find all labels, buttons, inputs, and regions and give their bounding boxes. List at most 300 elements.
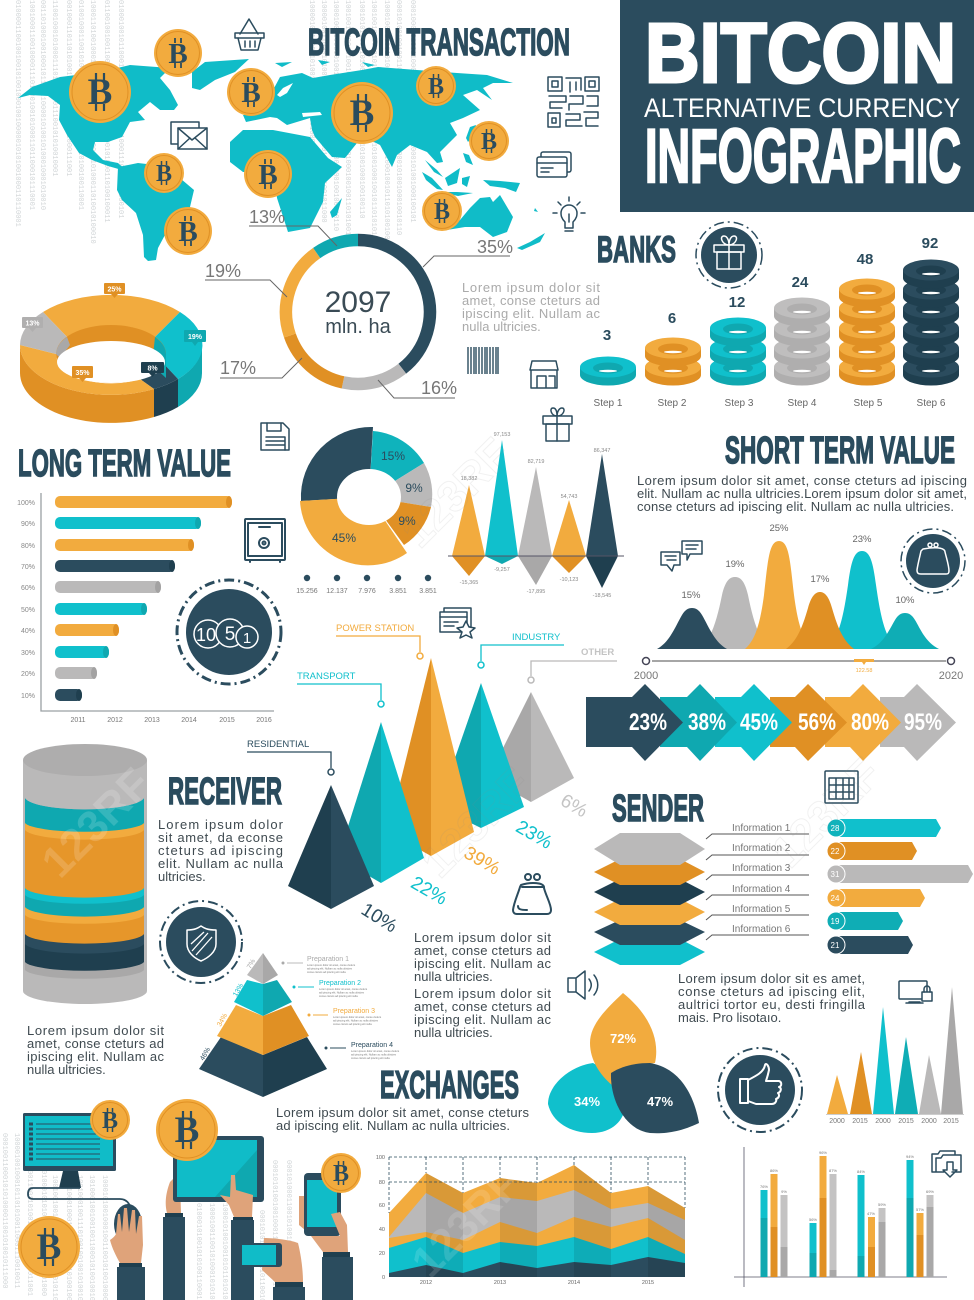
diamond chart: -9,257 bbox=[494, 567, 510, 573]
bell curve chart: 19% bbox=[725, 559, 745, 570]
icon: basket bbox=[235, 19, 264, 50]
bar 28 bbox=[827, 819, 941, 837]
ring chart 2097: 16% bbox=[421, 378, 457, 398]
donut chart: 9% bbox=[398, 514, 416, 528]
icon: store bbox=[530, 361, 558, 388]
callout: industry: INDUSTRY bbox=[512, 632, 561, 643]
step 1: Step 1 bbox=[594, 398, 623, 409]
step 5: 48 bbox=[857, 251, 873, 268]
coin: B bbox=[258, 159, 278, 191]
text block: receiver: sit amet, da econse bbox=[158, 830, 283, 845]
mouse hand bbox=[110, 1204, 145, 1300]
binary background bottom: 000101000110010100101001001001 bbox=[284, 1160, 292, 1286]
binary background top middle: 10001001100010100100011010101000101001000100101101010010010 bbox=[382, 0, 390, 248]
donut chart: 45% bbox=[332, 531, 356, 545]
world map bbox=[18, 59, 545, 261]
binary background top left: 10010001100100001110100010010100011011000101110001 bbox=[27, 0, 35, 210]
arrow band percentages: 38% bbox=[688, 709, 726, 736]
icon: purse bbox=[513, 874, 551, 914]
long term bar chart: 50% bbox=[21, 607, 35, 614]
icon: coins in circle: 5 bbox=[225, 624, 235, 645]
bar 24: 24 bbox=[831, 894, 840, 903]
bar 28: 28 bbox=[831, 824, 840, 833]
long term bar chart: 2014 bbox=[181, 717, 197, 724]
bell curve chart: 15% bbox=[681, 590, 701, 601]
icon: purse in circle bbox=[901, 529, 965, 593]
bar 24 bbox=[827, 889, 925, 907]
callout: industry bbox=[478, 632, 564, 668]
coin bbox=[244, 150, 292, 198]
diamond chart: -10,123 bbox=[560, 577, 578, 583]
callout: other: OTHER bbox=[581, 647, 614, 658]
callout: other bbox=[528, 647, 617, 683]
leaf chart: 47% bbox=[647, 1094, 673, 1109]
preparation 3: conse cteturs ad ipiscing elit nulla bbox=[333, 1022, 372, 1026]
preparation 3: Preparation 3 bbox=[333, 1008, 375, 1015]
binary background top left: 010000110010010010100100010010000010101001000110110001 bbox=[13, 0, 21, 227]
timeline: 2020 bbox=[939, 670, 963, 682]
coin: B bbox=[333, 1161, 349, 1187]
stacked area chart: 40 bbox=[379, 1227, 385, 1233]
text block: middle lorem 2 bbox=[414, 986, 552, 1040]
pyramid percent labels: 22% bbox=[407, 873, 451, 910]
watermark: 123RF bbox=[412, 759, 540, 887]
arrow band percentages: 45% bbox=[740, 709, 778, 736]
icon: monitor lock bbox=[899, 981, 932, 1003]
hexagon stack bbox=[594, 833, 705, 965]
coin: B bbox=[241, 77, 261, 109]
binary background top middle: 00010100100100110001010010011010100100010100100010010110 bbox=[394, 0, 402, 235]
information list: Information 6 bbox=[732, 924, 791, 935]
information list bbox=[706, 823, 809, 940]
text block: gray lorem: Lorem ipsum dolor sit bbox=[462, 280, 600, 295]
label 8% bbox=[141, 362, 164, 377]
text block: receiver: ultricies. bbox=[158, 869, 206, 884]
icon: envelope bbox=[171, 122, 207, 149]
timeline: 122.58 bbox=[856, 668, 872, 674]
coin: B bbox=[102, 1108, 118, 1134]
ring chart 2097: 19% bbox=[205, 261, 241, 281]
3D donut chart bbox=[20, 283, 206, 423]
step 6: 92 bbox=[922, 235, 938, 252]
coin bbox=[164, 207, 212, 255]
leaf chart: 72% bbox=[610, 1031, 636, 1046]
binary background top left bbox=[13, 0, 124, 244]
ring chart 2097: 35% bbox=[477, 237, 513, 257]
pyramid percent labels: 10% bbox=[357, 899, 401, 937]
long term bar chart: 100% bbox=[17, 500, 35, 507]
layered pyramid: 13% bbox=[232, 982, 245, 998]
mini triangle chart: 2000 bbox=[921, 1118, 937, 1125]
text block: sender: aultrici tortor eu, desti fringilla bbox=[678, 997, 866, 1012]
donut legend: 7.976 bbox=[358, 588, 376, 595]
step 3: Step 3 bbox=[725, 398, 754, 409]
grouped bar chart: 56% bbox=[809, 1217, 817, 1222]
text block: exchanges: ad ipiscing elit. Nullam ac nulla ultricies. bbox=[276, 1118, 510, 1133]
text block: gray lorem: nulla ultricies. bbox=[462, 319, 541, 334]
watermark bbox=[32, 429, 890, 1287]
pyramid layer: navy bbox=[199, 1037, 327, 1097]
icon: chat bubbles bbox=[661, 541, 702, 571]
heading: bitcoin transaction: BITCOIN TRANSACTION bbox=[308, 22, 570, 64]
coin bbox=[69, 61, 131, 123]
preparation 1: Lorem ipsum dolor sit amet, conse cteturs bbox=[307, 963, 356, 967]
mini triangle chart: 2015 bbox=[898, 1118, 914, 1125]
coin: B bbox=[168, 38, 188, 70]
long term bar chart: 40% bbox=[21, 628, 35, 635]
mini triangle chart bbox=[826, 987, 964, 1125]
monitor bbox=[23, 1113, 130, 1206]
timeline: 2000 bbox=[634, 670, 658, 682]
label 35%: 35% bbox=[75, 370, 90, 377]
text block: receiver: cteturs ad ipiscing bbox=[158, 843, 283, 858]
preparation 4: conse cteturs ad ipiscing elit nulla bbox=[351, 1056, 390, 1060]
illustration: tablet and hands bbox=[156, 1099, 361, 1300]
text block: left lorem: Lorem ipsum dolor sit bbox=[27, 1023, 164, 1038]
icon: coins in circle bbox=[177, 580, 281, 684]
grouped bar chart: 87% bbox=[829, 1168, 837, 1173]
text block: gray lorem: amet, conse cteturs ad bbox=[462, 293, 600, 308]
preparation 3 bbox=[308, 1008, 382, 1026]
heading: sender: SENDER bbox=[612, 788, 704, 830]
coin: B bbox=[37, 1227, 61, 1268]
binary background bottom: 100010100100010011001010010000 bbox=[100, 1175, 108, 1300]
text block: left lorem: ipiscing elit. Nullam ac bbox=[27, 1049, 164, 1064]
bar 21: 21 bbox=[831, 941, 840, 950]
icon: speaker bbox=[568, 971, 598, 999]
arrow band percentages: 56% bbox=[798, 709, 836, 736]
title block bbox=[620, 0, 974, 212]
icon: floppy disk bbox=[261, 423, 289, 450]
preparation 4: ad ipiscing elit. Nullam ac nulla ultricies bbox=[351, 1052, 397, 1056]
binary background bottom: 010100010001101010010010100100 bbox=[64, 1175, 72, 1300]
text block: middle lorem 1: amet, conse cteturs ad bbox=[414, 943, 551, 958]
icon: light bulb bbox=[553, 197, 585, 231]
coin: B bbox=[350, 93, 374, 134]
watermark: 123RF bbox=[762, 749, 890, 877]
long term bar chart: 30% bbox=[21, 650, 35, 657]
long term bar chart: 70% bbox=[21, 564, 35, 571]
layered pyramid: 7% bbox=[246, 958, 257, 970]
text block: left lorem bbox=[27, 1023, 164, 1077]
bar 22 bbox=[827, 842, 917, 860]
icon: qr code bbox=[548, 77, 599, 127]
binary background top middle: 10010010110001010010001101010010001010010001001011010101 bbox=[369, 0, 377, 235]
coin bbox=[422, 191, 462, 231]
diamond chart: 82,719 bbox=[528, 459, 544, 465]
preparation 1: ad ipiscing elit. Nullam ac nulla ultricies bbox=[307, 966, 353, 970]
preparation 3: Lorem ipsum dolor sit amet, conse cteturs bbox=[333, 1015, 382, 1019]
pyramid chart bbox=[247, 623, 617, 937]
binary background top left: 01100100100110001010010001110010100101000110100100011 bbox=[102, 0, 110, 223]
grouped bar chart: 47% bbox=[867, 1211, 875, 1216]
binary background top middle: 10000100110001010010001101010010001010010001001011000 bbox=[319, 0, 327, 223]
diamond chart: -17,895 bbox=[527, 589, 545, 595]
bitcoin coins on map bbox=[69, 29, 509, 255]
label 8%: 8% bbox=[147, 366, 158, 372]
preparation 2: Preparation 2 bbox=[319, 980, 361, 987]
pyramid: other bbox=[488, 692, 574, 802]
preparation 2 bbox=[292, 980, 368, 998]
preparation 4 bbox=[324, 1042, 400, 1060]
pyramid percent labels bbox=[357, 790, 591, 937]
binary background top left: 001000110110101001000100111000101000111001 bbox=[64, 0, 72, 176]
tablet bbox=[173, 1136, 264, 1202]
preparation 3: ad ipiscing elit. Nullam ac nulla ultricies bbox=[333, 1018, 379, 1022]
bell curve chart bbox=[657, 523, 939, 649]
information list: Information 2 bbox=[732, 843, 791, 854]
grouped bar chart: 9% bbox=[781, 1189, 787, 1194]
text block: sender: mais. Pro lisotaıo. bbox=[678, 1010, 781, 1025]
text block: sender: Lorem ipsum dolor sit es amet, bbox=[678, 971, 865, 986]
cylinder chart bbox=[23, 744, 147, 1004]
text block: receiver bbox=[158, 817, 284, 884]
text block: short term: Lorem ipsum dolor sit amet, conse cteturs ad ipiscing bbox=[637, 473, 967, 488]
donut legend: 15.256 bbox=[296, 588, 318, 595]
pyramid percent labels: 39% bbox=[460, 843, 504, 880]
long term bar chart: 2013 bbox=[144, 717, 160, 724]
binary background bottom: 100100010011101001001001010010 bbox=[75, 1175, 83, 1300]
information list: Information 1 bbox=[732, 823, 791, 834]
label 13% bbox=[22, 317, 43, 332]
donut legend bbox=[296, 575, 437, 595]
diamond chart: 97,153 bbox=[494, 432, 510, 438]
step 6 bbox=[903, 235, 959, 409]
binary background top left: 01001000110010100100010011100101000110100100110001 bbox=[76, 0, 84, 210]
grouped bar chart: 59% bbox=[878, 1202, 886, 1207]
stacked area chart: 2015 bbox=[642, 1280, 654, 1286]
long term bar chart: 60% bbox=[21, 585, 35, 592]
mini triangle chart: 2015 bbox=[943, 1118, 959, 1125]
step 2 bbox=[645, 310, 701, 409]
donut chart: 9% bbox=[405, 481, 423, 495]
text block: short term: elit. Nullam ac nulla ultricies.Lorem ipsum dolor sit amet, bbox=[637, 486, 967, 501]
mini triangle chart: 2015 bbox=[852, 1118, 868, 1125]
step 4 bbox=[774, 274, 830, 409]
arrow band percentages: 23% bbox=[629, 709, 667, 736]
binary background top middle: 1000010011000101001000110101001000101001000 bbox=[307, 0, 315, 181]
coin bbox=[416, 66, 456, 106]
map inland seas bbox=[277, 83, 322, 117]
stacked area chart: 0 bbox=[382, 1275, 385, 1281]
bar 22: 22 bbox=[831, 847, 840, 856]
ring chart 2097: 13% bbox=[249, 207, 285, 227]
step 4: 24 bbox=[792, 274, 809, 291]
binary background top middle: 100100110001010010011101010010001010010001001001101010011 bbox=[343, 0, 351, 239]
bar 19 bbox=[827, 912, 903, 930]
long term bar chart: 90% bbox=[21, 521, 35, 528]
layered pyramid: 34% bbox=[216, 1012, 229, 1028]
step 3: 12 bbox=[729, 294, 745, 311]
text block: gray lorem bbox=[462, 280, 600, 334]
text block: receiver: elit. Nullam ac nulla bbox=[158, 856, 284, 871]
grouped bar chart: 94% bbox=[906, 1154, 914, 1159]
icon: folder download bbox=[932, 1151, 961, 1177]
coin: B bbox=[175, 1110, 199, 1151]
pyramid: transport bbox=[338, 722, 424, 883]
icon: thumbs up in circle bbox=[718, 1048, 802, 1132]
text block: middle lorem 2: Lorem ipsum dolor sit bbox=[414, 986, 551, 1001]
icon: shield in circle bbox=[160, 901, 242, 983]
ring chart 2097: mln. ha bbox=[325, 316, 392, 338]
preparation 4: Preparation 4 bbox=[351, 1042, 393, 1049]
step 6: Step 6 bbox=[917, 398, 946, 409]
arrow band percentages bbox=[586, 684, 956, 761]
step 1: 3 bbox=[603, 327, 611, 344]
preparation 2: ad ipiscing elit. Nullam ac nulla ultricies bbox=[319, 990, 365, 994]
heading: exchanges: EXCHANGES bbox=[380, 1064, 519, 1107]
binary background bottom: 00010101001001000110001010010100 bbox=[270, 1160, 278, 1294]
donut legend: 3.851 bbox=[419, 588, 437, 595]
bar 21 bbox=[827, 936, 913, 954]
text block: gray lorem: ipiscing elit. Nullam ac bbox=[462, 306, 600, 321]
coin bbox=[154, 29, 202, 77]
illustration: monitor and mouse hand bbox=[18, 1100, 145, 1300]
donut chart bbox=[296, 427, 437, 595]
step 5 bbox=[839, 251, 895, 409]
binary background top left: 0100010010110001001010001110010010001110101001000101 bbox=[116, 0, 124, 218]
watermark: 123RF bbox=[32, 759, 160, 887]
coin: B bbox=[481, 129, 497, 155]
grouped bar chart: 84% bbox=[857, 1169, 865, 1174]
arrow bars bbox=[827, 819, 973, 954]
coin bbox=[331, 82, 393, 144]
step 4: Step 4 bbox=[788, 398, 817, 409]
preparation 2: Lorem ipsum dolor sit amet, conse cteturs bbox=[319, 987, 368, 991]
icon: coins in circle: 1 bbox=[243, 630, 251, 647]
donut legend: 12.137 bbox=[326, 588, 348, 595]
long term bar chart: 2012 bbox=[107, 717, 123, 724]
icon: gift small bbox=[543, 408, 572, 441]
text block: sender: conse cteturs ad ipiscing elit, bbox=[678, 984, 865, 999]
mini triangle chart: 2000 bbox=[875, 1118, 891, 1125]
pyramid layer: gray bbox=[247, 953, 278, 984]
binary background top left: 110010001010001110100010011100101010010001 bbox=[50, 0, 58, 176]
long term bar chart: 2011 bbox=[70, 717, 86, 724]
icon: gift in circle bbox=[696, 222, 762, 288]
heading: banks: BANKS bbox=[597, 229, 676, 270]
information list: Information 3 bbox=[732, 863, 791, 874]
long term bar chart: 10% bbox=[21, 693, 35, 700]
step 2: 6 bbox=[668, 310, 676, 327]
diamond chart: 86,347 bbox=[594, 448, 610, 454]
text block: middle lorem 1: ipiscing elit. Nullam ac bbox=[414, 956, 552, 971]
arrow band percentages: 95% bbox=[904, 709, 942, 736]
grouped bar chart: 86% bbox=[770, 1168, 778, 1173]
callout: transport: TRANSPORT bbox=[297, 671, 356, 682]
coin: B bbox=[434, 199, 450, 225]
binary background top middle: 1001010110001010010001101011001000101001000100100110 bbox=[357, 0, 365, 218]
preparation 2: conse cteturs ad ipiscing elit nulla bbox=[319, 994, 358, 998]
coin: B bbox=[88, 72, 112, 113]
information list: Information 4 bbox=[732, 884, 791, 895]
information list: Information 5 bbox=[732, 904, 791, 915]
icon: document star bbox=[440, 608, 475, 638]
long term bar chart: 2015 bbox=[219, 717, 235, 724]
text block: left lorem: nulla ultricies. bbox=[27, 1062, 106, 1077]
binary background bottom: 1000010010001011010100110001110010011 bbox=[12, 1133, 20, 1288]
grouped bar chart: 76% bbox=[760, 1184, 768, 1189]
step 5: Step 5 bbox=[854, 398, 883, 409]
step 2: Step 2 bbox=[658, 398, 687, 409]
icon: cards bbox=[537, 152, 571, 177]
grouped bar chart: 57% bbox=[916, 1207, 924, 1212]
timeline bbox=[634, 658, 963, 682]
coin bbox=[469, 121, 509, 161]
text block: middle lorem 1 bbox=[414, 930, 552, 984]
stacked area chart: 60 bbox=[379, 1203, 385, 1209]
pyramid: power station bbox=[388, 658, 474, 856]
diamond chart: 54,743 bbox=[561, 494, 577, 500]
binary background top left: 1000110100100010110100011000101001001110100011010010100010 bbox=[88, 0, 96, 244]
coin bbox=[18, 1216, 80, 1278]
watermark: 123RF bbox=[392, 429, 520, 557]
stacked area chart: 100 bbox=[376, 1155, 385, 1161]
icon: barcode bbox=[468, 347, 498, 374]
binary background bottom: 100100100101000101000100010110 bbox=[50, 1175, 58, 1300]
bell curve chart: 23% bbox=[852, 534, 872, 545]
stacked area chart: 2013 bbox=[494, 1280, 506, 1286]
pyramid: industry bbox=[438, 683, 524, 828]
phone vertical bbox=[299, 1173, 353, 1300]
binary background top middle: 1000100110001010010001101011001000101001000100100110110 bbox=[331, 0, 339, 231]
ring chart 2097 bbox=[205, 207, 513, 398]
arrow band percentages: 80% bbox=[851, 709, 889, 736]
diamond chart: -18,545 bbox=[593, 593, 611, 599]
long term bar chart: 2016 bbox=[256, 717, 272, 724]
text block: middle lorem 2: ipiscing elit. Nullam ac bbox=[414, 1012, 552, 1027]
step 1 bbox=[580, 327, 636, 409]
pyramid percent labels: 23% bbox=[512, 817, 556, 854]
label 19% bbox=[184, 330, 206, 346]
text block: exchanges: Lorem ipsum dolor sit amet, conse cteturs bbox=[276, 1105, 530, 1120]
icon: safe bbox=[245, 519, 285, 562]
ring chart 2097: 17% bbox=[220, 358, 256, 378]
bell curve chart: 25% bbox=[769, 523, 789, 534]
ring chart 2097: 2097 bbox=[325, 286, 391, 319]
coin bbox=[144, 153, 184, 193]
bar 31 bbox=[827, 865, 973, 883]
text block: sender bbox=[678, 971, 866, 1025]
text block: receiver: Lorem ipsum dolor bbox=[158, 817, 284, 832]
callout: power station bbox=[336, 623, 423, 659]
bell curve chart: 10% bbox=[895, 595, 915, 606]
diamond chart bbox=[448, 432, 624, 599]
coin bbox=[156, 1099, 218, 1161]
leaf chart bbox=[548, 993, 699, 1133]
label 35% bbox=[72, 366, 93, 382]
text block: middle lorem 1: Lorem ipsum dolor sit bbox=[414, 930, 551, 945]
stacked area chart: 2012 bbox=[420, 1280, 432, 1286]
text block: middle lorem 1: nulla ultricies. bbox=[414, 969, 493, 984]
diamond chart: 18,382 bbox=[461, 476, 477, 482]
donut legend: 3.851 bbox=[389, 588, 407, 595]
bar 19: 19 bbox=[831, 917, 840, 926]
preparation 4: Lorem ipsum dolor sit amet, conse cteturs bbox=[351, 1049, 400, 1053]
heading: receiver: RECEIVER bbox=[168, 771, 282, 813]
stacked area chart: 2014 bbox=[568, 1280, 580, 1286]
binary background top middle bbox=[307, 0, 416, 248]
donut chart: 15% bbox=[381, 449, 405, 463]
heading: long term value: LONG TERM VALUE bbox=[18, 443, 231, 485]
preparation 1: Preparation 1 bbox=[307, 956, 349, 963]
label 13%: 13% bbox=[25, 320, 40, 328]
icon: calendar bbox=[825, 771, 858, 803]
callout: residential bbox=[247, 739, 334, 775]
callout: power station: POWER STATION bbox=[336, 623, 414, 634]
long term bar chart: 80% bbox=[21, 543, 35, 550]
bar 31: 31 bbox=[831, 870, 840, 879]
